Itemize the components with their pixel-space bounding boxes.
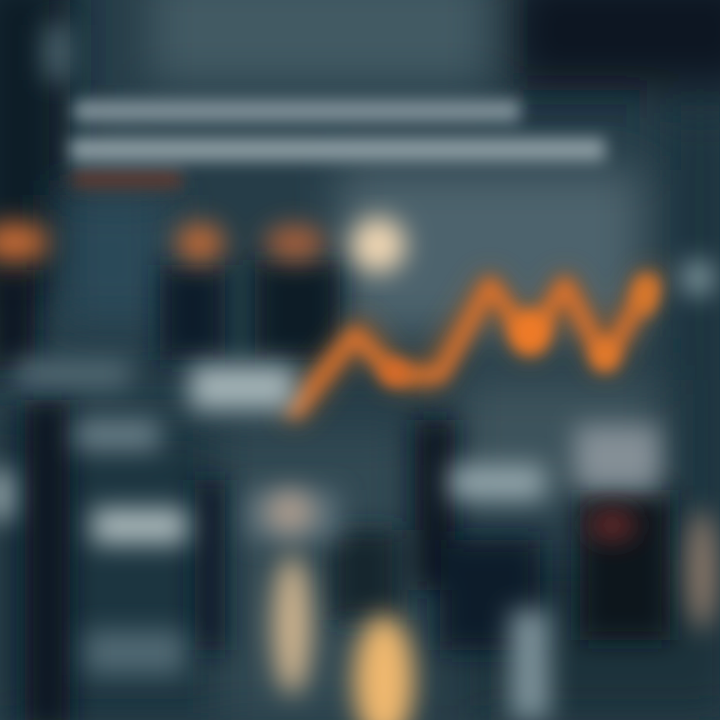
line chart <box>295 280 650 410</box>
title line one <box>74 100 520 122</box>
orange markers row <box>0 217 406 273</box>
chart line <box>295 285 650 410</box>
warm lights at bottom <box>265 490 717 720</box>
chart line glow <box>295 280 650 410</box>
dark vertical structures <box>0 260 670 720</box>
subtitle accent <box>72 170 182 188</box>
chart line highlights <box>381 275 657 384</box>
title line two <box>70 138 605 161</box>
title <box>70 100 605 188</box>
